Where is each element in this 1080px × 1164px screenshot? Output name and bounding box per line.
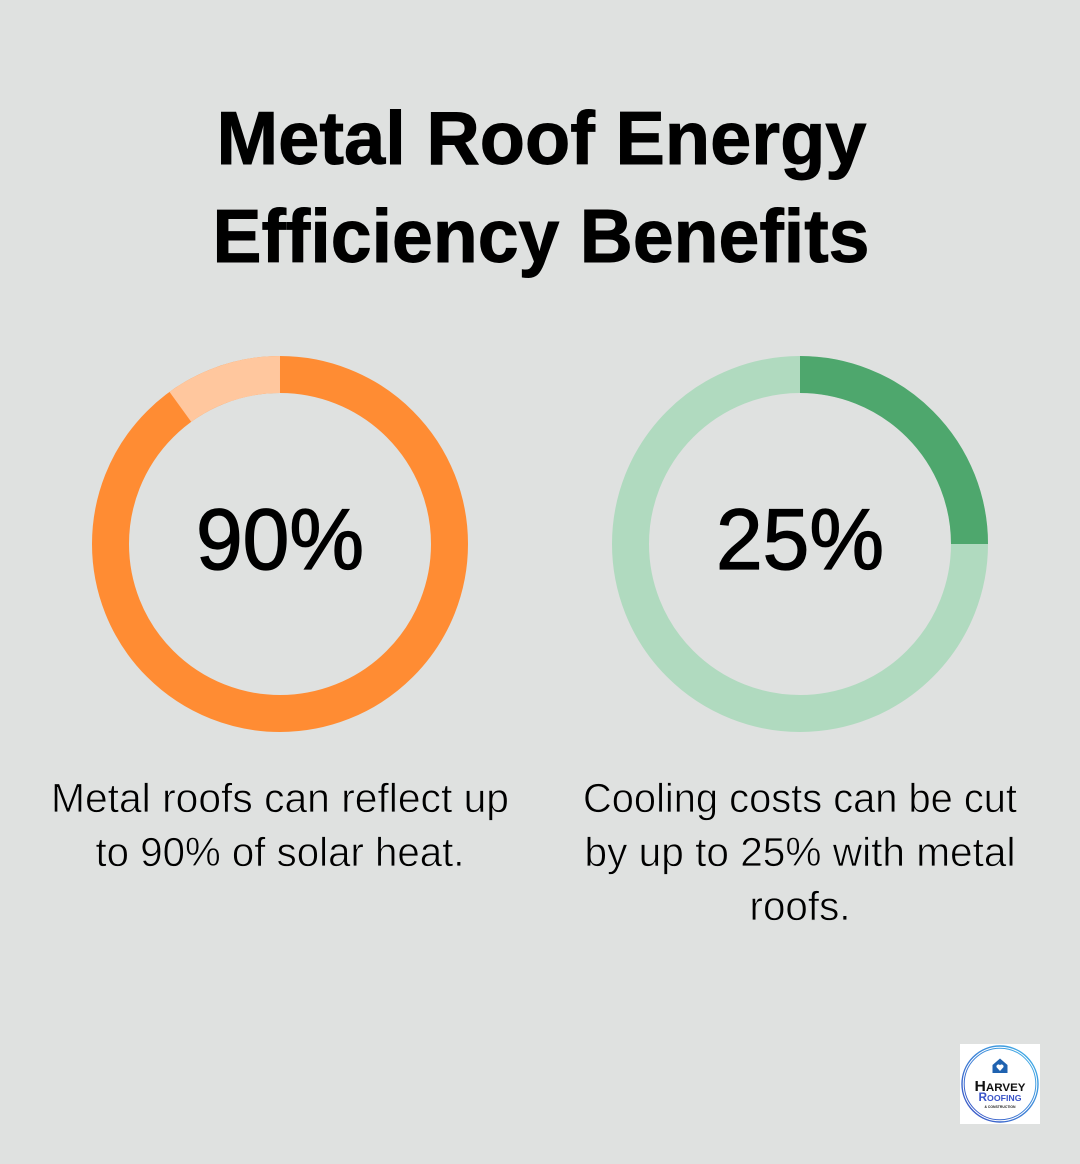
caption: solar heat: Metal roofs can reflect up: [51, 775, 509, 821]
logo: Harvey Roofing & Construction: & CONSTRUCTION: [984, 1104, 1016, 1109]
title: Metal Roof Energy: [216, 96, 867, 180]
title: [212, 96, 870, 278]
stat: 25%: 25%: [716, 492, 884, 588]
logo: Harvey Roofing & Construction: [960, 1044, 1040, 1124]
donut chart: 90%: [110, 374, 450, 714]
caption: solar heat: [51, 775, 509, 875]
caption: cooling costs: by up to 25% with metal: [584, 829, 1016, 875]
caption: cooling costs: Cooling costs can be cut: [583, 775, 1018, 821]
title: Efficiency Benefits: [212, 194, 870, 278]
logo: Harvey Roofing & Construction: ROOFING: [978, 1092, 1022, 1104]
caption: cooling costs: [583, 775, 1018, 929]
panel: 90% solar heat reflection: [51, 374, 509, 875]
caption: solar heat: to 90% of solar heat.: [96, 829, 464, 875]
donut chart: 25%: [630, 374, 970, 714]
caption: cooling costs: roofs.: [750, 883, 850, 929]
panel: 25% cooling cost reduction: [583, 374, 1018, 929]
logo wordmark: HARVEY: [974, 1078, 1026, 1095]
stat: 90%: 90%: [196, 492, 364, 588]
icon: house with heart: [992, 1058, 1008, 1073]
